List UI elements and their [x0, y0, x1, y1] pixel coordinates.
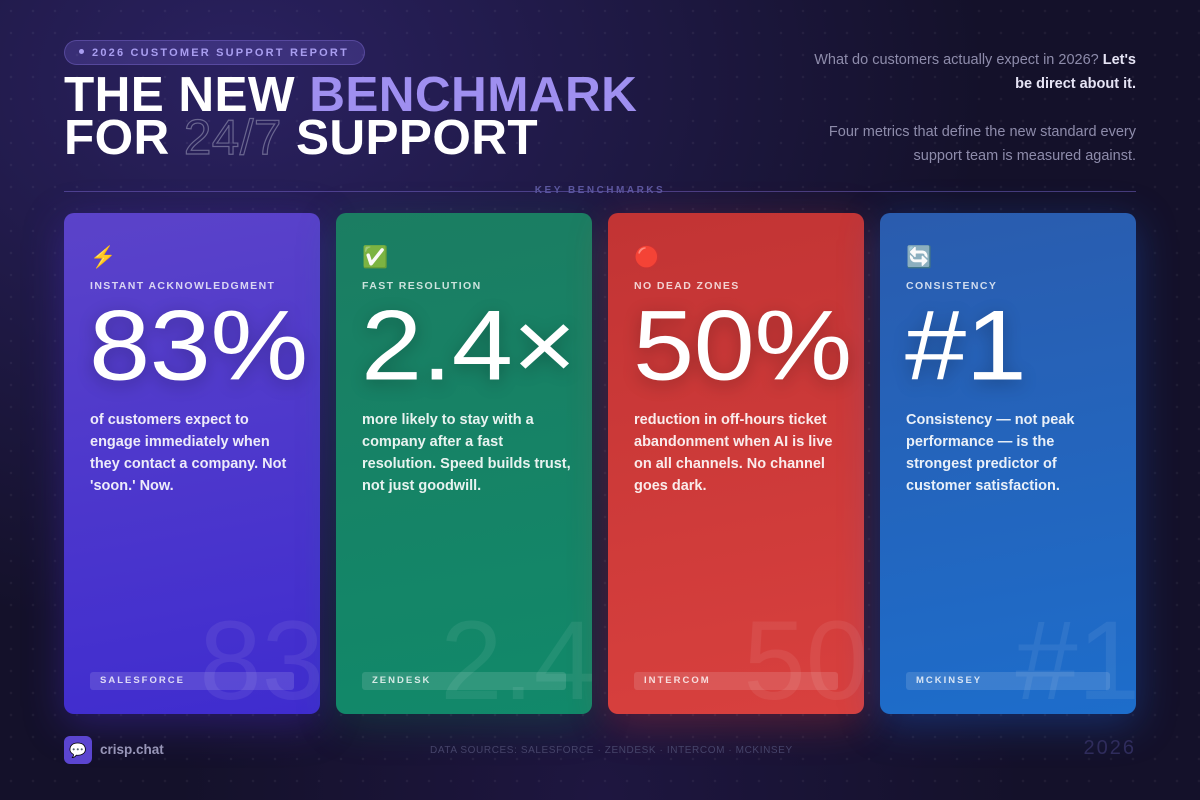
source tag: MCKINSEY	[916, 675, 982, 686]
label: CONSISTENCY	[906, 280, 997, 292]
source tag: INTERCOM	[644, 675, 711, 686]
icon: crisp logo: 💬	[69, 742, 87, 758]
icon: red circle: 🔴	[634, 241, 660, 271]
source tag	[90, 672, 294, 690]
brand name: crisp.chat	[100, 742, 164, 757]
source tag: ZENDESK	[372, 675, 431, 686]
title: THE NEW BENCHMARK	[64, 67, 637, 122]
title	[64, 67, 637, 165]
intro text	[814, 52, 1136, 164]
data sources: DATA SOURCES: SALESFORCE · ZENDESK · INTERCOM · MCKINSEY	[430, 745, 793, 756]
title: FOR 24/7 SUPPORT	[64, 110, 538, 165]
source tag	[906, 672, 1110, 690]
source tag: SALESFORCE	[100, 675, 185, 686]
panel: fast resolution	[336, 213, 592, 714]
section heading: key benchmarks: KEY BENCHMARKS	[535, 185, 665, 196]
source tag	[634, 672, 838, 690]
pill: report label: 2026 CUSTOMER SUPPORT REPORT	[92, 47, 349, 59]
description: reduction in off-hours ticket abandonment when AI is live on all channels. No channel goes dark.	[634, 412, 832, 494]
panel: no dead zones	[608, 213, 864, 714]
icon: check: ✅	[362, 241, 388, 271]
icon: repeat: 🔄	[906, 241, 932, 271]
year: 2026	[1084, 737, 1136, 759]
source tag	[362, 672, 566, 690]
big number: 83%	[89, 291, 308, 401]
icon: lightning: ⚡	[90, 241, 116, 271]
pill: report label	[64, 40, 365, 65]
big number: #1	[905, 291, 1026, 401]
description: Consistency — not peak performance — is the strongest predictor of customer satisfaction.	[906, 412, 1074, 494]
description: more likely to stay with a company after a fast resolution. Speed builds trust, not just goodwill.	[362, 412, 571, 494]
label: FAST RESOLUTION	[362, 280, 482, 292]
panel: consistency	[880, 213, 1136, 714]
big number: 2.4×	[361, 291, 576, 401]
label: INSTANT ACKNOWLEDGMENT	[90, 280, 275, 292]
panel: instant acknowledgment	[64, 213, 320, 714]
intro text: What do customers actually expect in 2026? Let's be direct about it.	[814, 52, 1136, 92]
intro text: Four metrics that define the new standard every support team is measured against.	[829, 124, 1136, 164]
description: of customers expect to engage immediately when they contact a company. Not 'soon.' Now.	[90, 412, 286, 494]
label: NO DEAD ZONES	[634, 280, 740, 292]
icon: crisp logo	[64, 736, 92, 764]
big number: 50%	[633, 291, 852, 401]
